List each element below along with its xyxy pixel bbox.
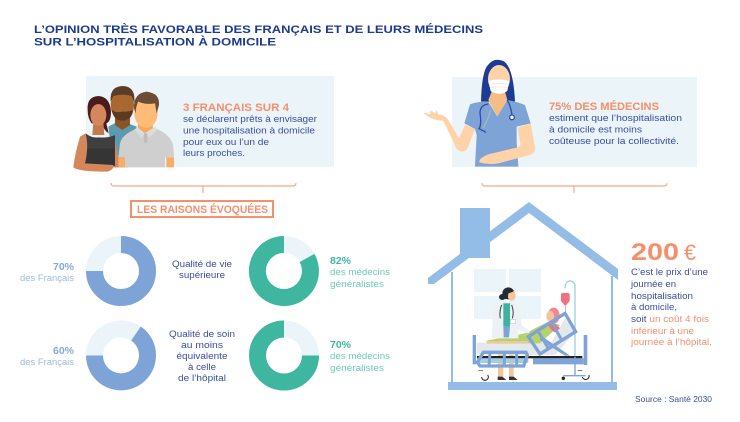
label: 60% des Français: 60% [53, 345, 75, 357]
text: 75% des médecins: à domicile est moins [549, 124, 642, 136]
label: 70% des Français: des Français [20, 273, 74, 284]
text: 75% des médecins: 75% DES MÉDECINS [549, 100, 659, 113]
source: Source : Santé 2030 [635, 394, 712, 404]
text: 3 Français sur 4: se déclarent prêts à envisager [183, 114, 318, 125]
label: 70% des Français [20, 261, 75, 284]
label: 82% des médecins: des médecins [330, 267, 390, 278]
label: qualité de soin: Qualité de soin [169, 329, 235, 340]
label: 70% des médecins: 70% [330, 339, 352, 351]
label: qualité de soin: de l’hôpital [178, 373, 226, 384]
label: 60% des Français: des Français [20, 357, 74, 368]
text: 75% des médecins: estiment que l’hospitalisation [549, 113, 682, 124]
label: qualité de vie: Qualité de vie [172, 259, 232, 270]
label: 70% des médecins [330, 339, 390, 374]
text: price explanation: à domicile, [631, 302, 677, 313]
text: price explanation: journée à l’hôpital. [630, 337, 712, 348]
text: price explanation [630, 267, 712, 348]
donut: 70% des médecins [258, 329, 310, 382]
label: 60% des Français [20, 345, 75, 368]
bracket: left [111, 183, 296, 193]
donut: 70% des Français [94, 244, 148, 298]
icon: house [428, 202, 618, 390]
text: price explanation: C’est le prix d’une [631, 267, 708, 278]
illustration: doctor and patient in bed [473, 281, 589, 380]
label: qualité de soin: à celle [188, 362, 216, 373]
title: SUR L’HOSPITALISATION À DOMICILE [34, 36, 276, 48]
text: price explanation: inférieur à une [631, 326, 694, 337]
donut: 60% des Français [94, 329, 148, 382]
heading: les raisons évoquées: LES RAISONS ÉVOQUÉES [137, 203, 268, 216]
price: 200 euros [631, 239, 696, 266]
panel: doctors opinion [452, 77, 697, 167]
label: qualité de vie: supérieure [179, 270, 225, 281]
donut: 82% des médecins [257, 244, 310, 298]
price: 200 euros: € [684, 240, 696, 265]
bracket: right [482, 183, 667, 193]
text: 75% des médecins [549, 100, 682, 147]
price: 200 euros: 200 [631, 239, 679, 266]
text: 3 Français sur 4: pour eux ou l’un de [183, 137, 269, 148]
title: L’OPINION TRÈS FAVORABLE DES FRANÇAIS ET DE LEURS MÉDECINS [34, 23, 483, 36]
text: 3 Français sur 4: leurs proches. [183, 148, 245, 159]
label: 82% des médecins: 82% [330, 255, 352, 267]
text: 3 Français sur 4 [183, 102, 318, 159]
text: price explanation: soit un coût 4 fois [631, 314, 709, 325]
label: 70% des médecins: généralistes [330, 363, 384, 374]
text: 75% des médecins: coûteuse pour la collectivité. [549, 136, 679, 147]
text: 3 Français sur 4: une hospitalisation à domicile [183, 126, 315, 136]
label: 70% des Français: 70% [53, 261, 75, 273]
text: price explanation: journée en [630, 279, 676, 290]
icon: masked doctor [423, 60, 535, 167]
label: 70% des médecins: des médecins [330, 351, 390, 362]
label: qualité de vie [172, 259, 232, 281]
label: 82% des médecins: généralistes [330, 279, 384, 290]
icon: three people [73, 86, 174, 172]
title [34, 23, 483, 48]
label: qualité de soin [169, 329, 235, 384]
label: qualité de soin: au moins [181, 340, 223, 351]
text: 3 Français sur 4: 3 FRANÇAIS SUR 4 [183, 102, 290, 114]
text: price explanation: hospitalisation [631, 291, 693, 302]
panel: French opinion [86, 76, 334, 167]
label: 82% des médecins [330, 255, 390, 290]
label: qualité de soin: équivalente [176, 351, 228, 362]
